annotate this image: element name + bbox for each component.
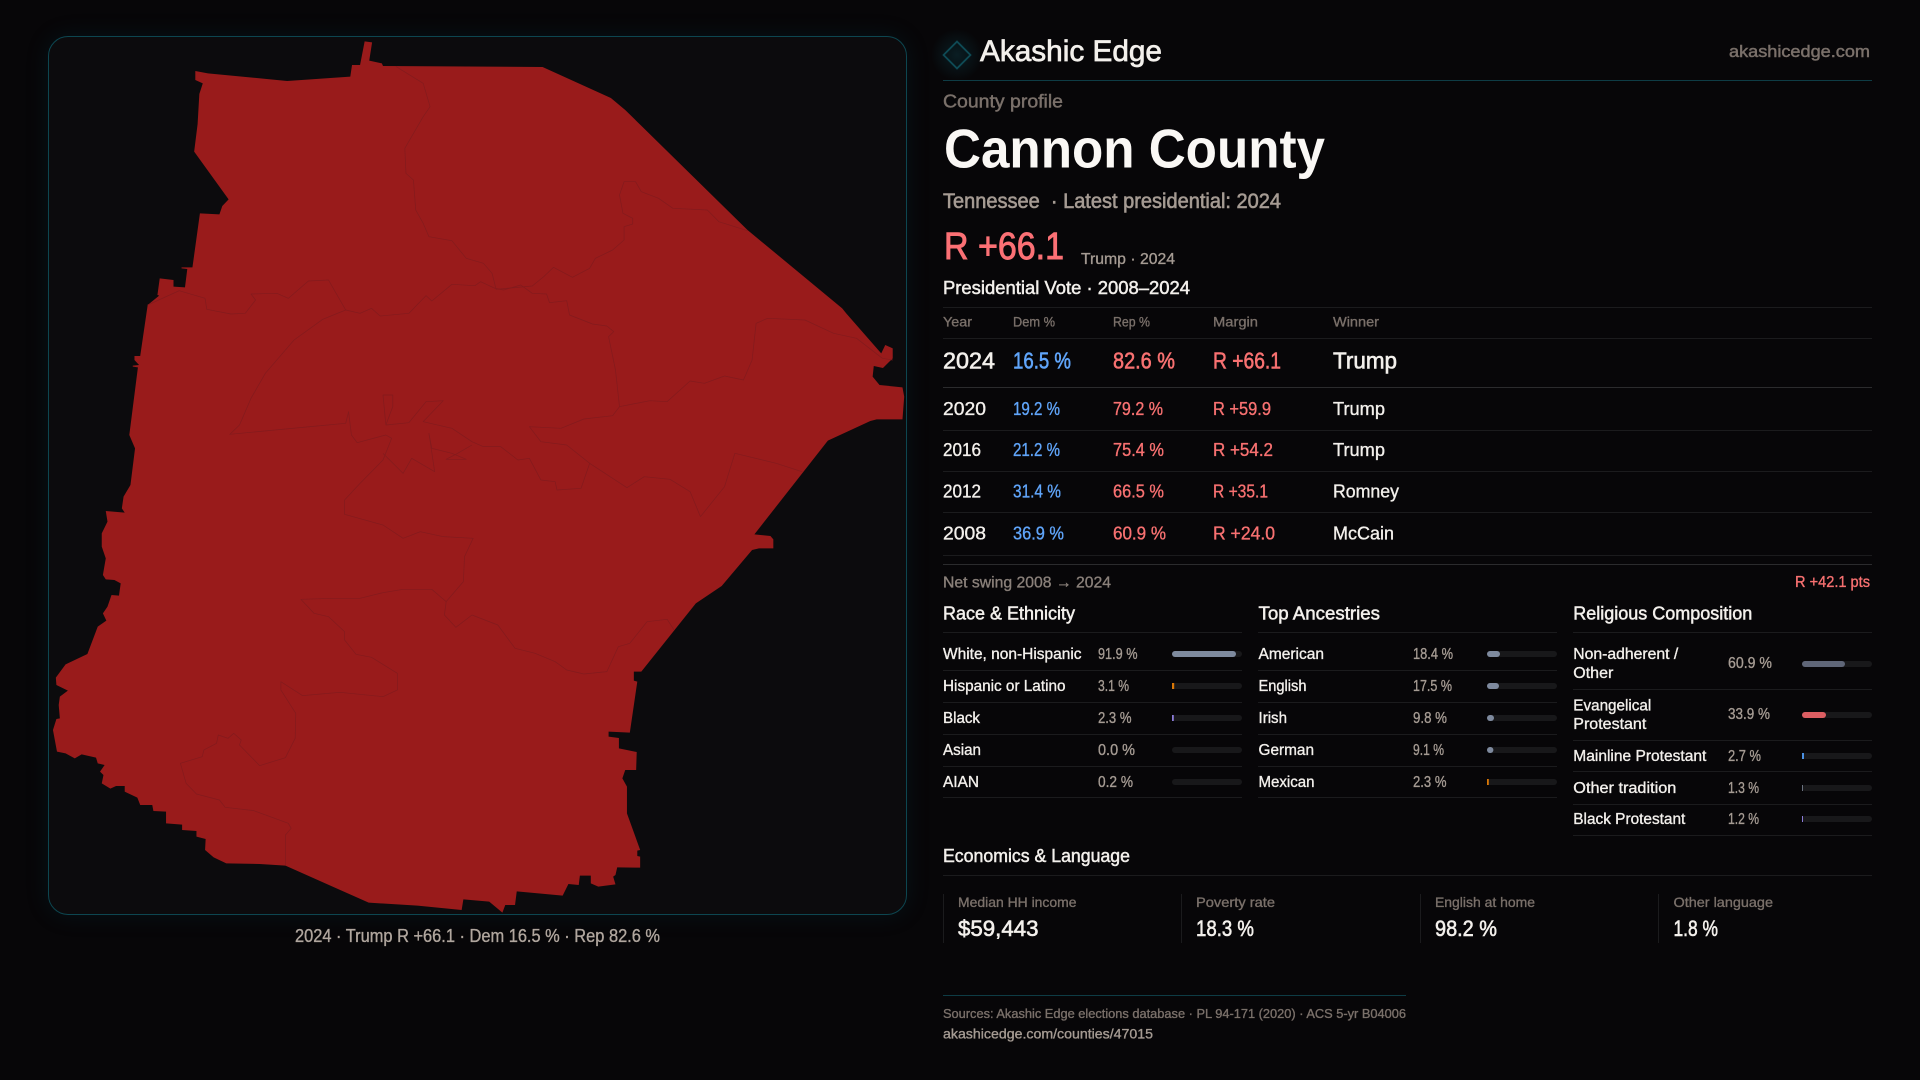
stat: median household income: $59,443: [958, 916, 1038, 941]
row: Evangelical Protestant: 33.9 %: [1728, 706, 1770, 723]
stat: english at home: 98.2 %: [1435, 916, 1497, 941]
row: AIAN: [943, 774, 1242, 791]
row: Mainline Protestant: Mainline Protestant: [1573, 748, 1707, 765]
row 2024: R +66.1: [1213, 348, 1281, 374]
row 2008: McCain: [1333, 522, 1394, 544]
row 2016: 2016: [943, 439, 981, 460]
row: German: [1258, 742, 1557, 759]
net swing row: [943, 574, 1870, 592]
subdivision boundaries: [148, 67, 893, 866]
row 2024: 2024: [943, 348, 995, 374]
stat: english at home: [1420, 894, 1535, 943]
stat: other language: 1.8 %: [1674, 916, 1718, 941]
table heading: Presidential Vote · 2008–2024: [943, 277, 1190, 298]
row 2012: [943, 480, 1400, 502]
subtitle: Tennessee · Latest presidential: 2024: [943, 190, 1281, 213]
row: Mexican: Mexican: [1258, 774, 1314, 791]
panel: top ancestries: [1258, 602, 1557, 798]
county map: [53, 41, 904, 913]
row 2016: 21.2 %: [1013, 439, 1060, 460]
row: American: 18.4 %: [1413, 646, 1453, 663]
row: Evangelical Protestant: Evangelical: [1573, 698, 1651, 714]
heading: Economics & Language: [943, 845, 1130, 866]
row 2016: R +54.2: [1213, 439, 1273, 460]
stat: poverty rate: [1182, 894, 1275, 943]
site url: akashicedge.com: [1729, 42, 1870, 61]
row: Asian: Asian: [943, 742, 981, 759]
row: American: American: [1258, 646, 1324, 663]
row 2024: 16.5 %: [1013, 348, 1071, 374]
stat: english at home: English at home: [1435, 894, 1535, 910]
row: Mainline Protestant: 2.7 %: [1728, 748, 1761, 765]
row: Evangelical Protestant: [1573, 698, 1872, 733]
stat: median household income: Median HH income: [958, 894, 1077, 910]
row: Black Protestant: 1.2 %: [1728, 811, 1759, 828]
row 2024: [943, 348, 1397, 374]
row 2020: R +59.9: [1213, 398, 1271, 419]
table header row: Winner: [1333, 314, 1379, 330]
footer sources: [943, 996, 1406, 1042]
row: Mexican: [1258, 774, 1557, 791]
row 2008: 36.9 %: [1013, 522, 1064, 544]
panel: race and ethnicity: [943, 602, 1242, 798]
net swing row: R +42.1 pts: [1795, 574, 1870, 591]
heading: Top Ancestries: [1258, 602, 1380, 624]
table header row: Rep %: [1113, 314, 1150, 330]
row: Non-adherent / Other: 60.9 %: [1728, 655, 1772, 672]
row: Mainline Protestant: [1573, 748, 1872, 765]
map panel frame: [48, 36, 907, 915]
row 2012: Romney: [1333, 480, 1400, 502]
row: Black: 2.3 %: [1098, 710, 1132, 727]
row: Black: Black: [943, 710, 980, 727]
stat: median household income: [944, 894, 1077, 943]
brand name: Akashic Edge: [980, 35, 1162, 68]
row: Black Protestant: Black Protestant: [1573, 811, 1686, 828]
map caption: 2024 · Trump R +66.1 · Dem 16.5 % · Rep 82.6 %: [295, 926, 660, 946]
stat: poverty rate: 18.3 %: [1196, 916, 1254, 941]
footer sources: akashicedge.com/counties/47015: [943, 1026, 1153, 1042]
row 2012: 31.4 %: [1013, 480, 1061, 502]
row: White, non-Hispanic: White, non-Hispanic: [943, 646, 1082, 663]
panel: religious composition: [1573, 602, 1872, 836]
row 2008: R +24.0: [1213, 522, 1275, 544]
logo diamond icon: [931, 29, 983, 81]
table header row: Margin: [1213, 314, 1258, 330]
stat: other language: Other language: [1674, 894, 1773, 910]
stat: poverty rate: Poverty rate: [1196, 894, 1275, 910]
row: Mexican: 2.3 %: [1413, 774, 1447, 791]
economics and language: [943, 845, 1872, 943]
row 2020: 79.2 %: [1113, 398, 1163, 419]
row: Hispanic or Latino: Hispanic or Latino: [943, 678, 1066, 695]
row: American: [1258, 646, 1557, 663]
row: AIAN: AIAN: [943, 774, 979, 791]
row: Asian: 0.0 %: [1098, 742, 1135, 759]
row 2008: 2008: [943, 522, 986, 544]
county outline: [53, 41, 904, 913]
row 2020: 2020: [943, 398, 986, 419]
row 2012: 2012: [943, 480, 981, 502]
row: German: 9.1 %: [1413, 742, 1444, 759]
row: English: English: [1258, 678, 1306, 695]
row: Non-adherent / Other: Non-adherent /: [1573, 646, 1679, 663]
table header row: Year: [943, 314, 972, 330]
row 2020: [943, 398, 1385, 419]
stat: other language: [1658, 894, 1773, 943]
row: Other tradition: 1.3 %: [1728, 780, 1759, 797]
row 2012: R +35.1: [1213, 480, 1268, 502]
row 2020: 19.2 %: [1013, 398, 1060, 419]
row 2008: [943, 522, 1394, 544]
headline winner: Trump · 2024: [1081, 251, 1175, 268]
row: German: German: [1258, 742, 1314, 759]
net swing row: Net swing 2008 → 2024: [943, 574, 1111, 592]
row: Non-adherent / Other: Other: [1573, 665, 1613, 682]
row 2016: Trump: [1333, 439, 1385, 460]
row 2016: [943, 439, 1385, 460]
row: English: [1258, 678, 1557, 695]
presidential vote table: [943, 277, 1872, 556]
headline margin: R +66.1: [944, 226, 1064, 268]
eyebrow: County profile: [943, 92, 1063, 112]
row 2012: 66.5 %: [1113, 480, 1164, 502]
row: Evangelical Protestant: Protestant: [1573, 716, 1647, 733]
row 2020: Trump: [1333, 398, 1385, 419]
row: English: 17.5 %: [1413, 678, 1452, 695]
row: Black: [943, 710, 1242, 727]
row: White, non-Hispanic: 91.9 %: [1098, 646, 1138, 663]
row: Irish: Irish: [1258, 710, 1287, 727]
row 2008: 60.9 %: [1113, 522, 1166, 544]
table header row: Dem %: [1013, 314, 1055, 330]
row: Non-adherent / Other: [1573, 646, 1872, 682]
footer sources: Sources: Akashic Edge elections database · PL 94-171 (2020) · ACS 5-yr B04006: [943, 1006, 1406, 1021]
row: Other tradition: [1573, 780, 1872, 797]
row 2024: Trump: [1333, 348, 1397, 374]
row 2024: 82.6 %: [1113, 348, 1175, 374]
heading: Religious Composition: [1573, 602, 1752, 624]
row: Asian: [943, 742, 1242, 759]
row: AIAN: 0.2 %: [1098, 774, 1133, 791]
header: [931, 29, 1872, 81]
table header row: [943, 314, 1379, 330]
row: Irish: 9.8 %: [1413, 710, 1447, 727]
row: Other tradition: Other tradition: [1573, 780, 1676, 797]
heading: Race & Ethnicity: [943, 602, 1076, 624]
row: Hispanic or Latino: [943, 678, 1242, 695]
row: Black Protestant: [1573, 811, 1872, 828]
row: Hispanic or Latino: 3.1 %: [1098, 678, 1129, 695]
row: White, non-Hispanic: [943, 646, 1242, 663]
row: Irish: [1258, 710, 1557, 727]
county title block: [943, 92, 1325, 268]
row 2016: 75.4 %: [1113, 439, 1164, 460]
county name: Cannon County: [944, 118, 1325, 180]
